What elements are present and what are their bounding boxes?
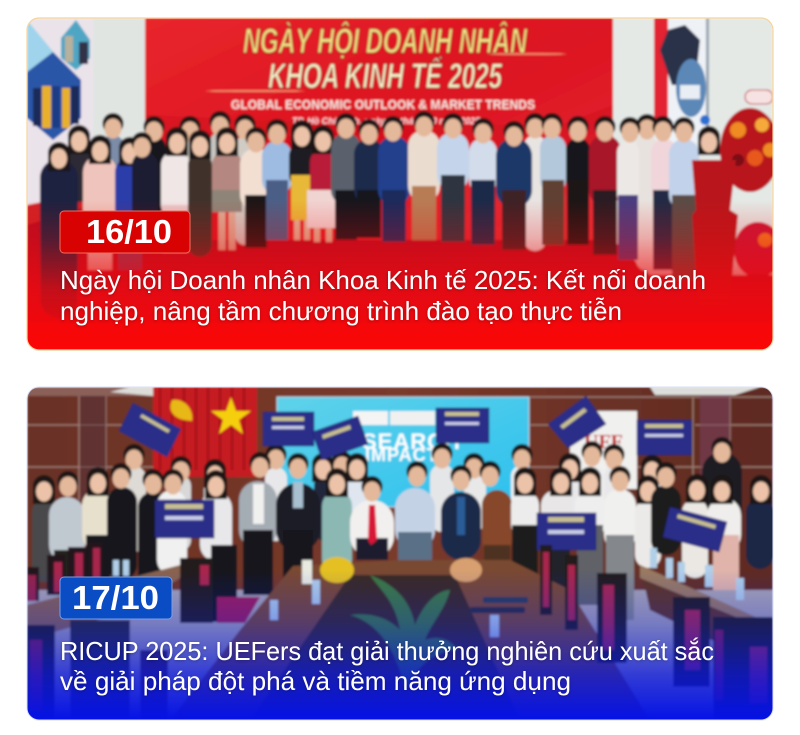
front row people xyxy=(33,452,772,622)
caption: event 17/10: RICUP 2025: UEFers đạt giải thưởng nghiên cứu xuất sắc xyxy=(60,636,714,666)
caption: event 16/10: nghiệp, nâng tầm chương trình đào tạo thực tiễn xyxy=(60,296,622,326)
chairs xyxy=(27,542,773,720)
back row people xyxy=(124,437,732,540)
photo: RICUP group: SEARCH xyxy=(362,429,461,454)
panel border xyxy=(27,18,773,350)
panel border xyxy=(27,387,773,720)
flowers xyxy=(720,108,780,192)
front row people xyxy=(48,111,738,305)
photo: RICUP group: UFF xyxy=(584,431,623,453)
caption: event 17/10: về giải pháp đột phá và tiềm năng ứng dụng xyxy=(60,666,571,696)
wall panels xyxy=(27,387,773,500)
date badge: 16/10: 16/10 xyxy=(86,213,172,250)
photo: RICUP group xyxy=(27,387,773,720)
screen xyxy=(277,397,529,507)
signs xyxy=(119,396,727,552)
backdrop title text: TP. Hồ Chí Minh, ngày 15 tháng 10 năm 2025 xyxy=(292,116,481,126)
left hexagon poster wall xyxy=(30,20,91,202)
panel: event 16/10 xyxy=(27,18,782,350)
photo: RICUP group: IMPACT xyxy=(365,445,439,465)
backdrop title text xyxy=(231,21,535,126)
tables xyxy=(182,559,640,708)
caption: event 16/10 xyxy=(60,265,706,326)
backdrop title text: NGÀY HỘI DOANH NHÂN xyxy=(243,21,527,61)
date badge: 16/10 xyxy=(60,211,190,253)
right wall and banner xyxy=(613,18,773,243)
caption: event 17/10 xyxy=(60,636,714,696)
caption: event 16/10: Ngày hội Doanh nhân Khoa Kinh tế 2025: Kết nối doanh xyxy=(60,265,706,295)
blue gradient overlay xyxy=(27,570,773,720)
floor xyxy=(27,590,773,720)
flag xyxy=(153,387,257,477)
flowers and bottles xyxy=(320,557,354,583)
date badge: 17/10 xyxy=(60,577,172,619)
panel: event 17/10 xyxy=(27,387,773,720)
backdrop title text: KHOA KINH TẾ 2025 xyxy=(268,56,502,96)
backdrop title text: GLOBAL ECONOMIC OUTLOOK & MARKET TRENDS xyxy=(231,98,535,112)
back row people xyxy=(68,111,658,260)
photo: business day group xyxy=(27,18,782,350)
red carpet xyxy=(28,206,772,330)
red gradient overlay xyxy=(27,200,773,350)
red backdrop xyxy=(145,18,613,243)
UEF board xyxy=(570,411,637,489)
date badge: 17/10: 17/10 xyxy=(72,579,159,616)
